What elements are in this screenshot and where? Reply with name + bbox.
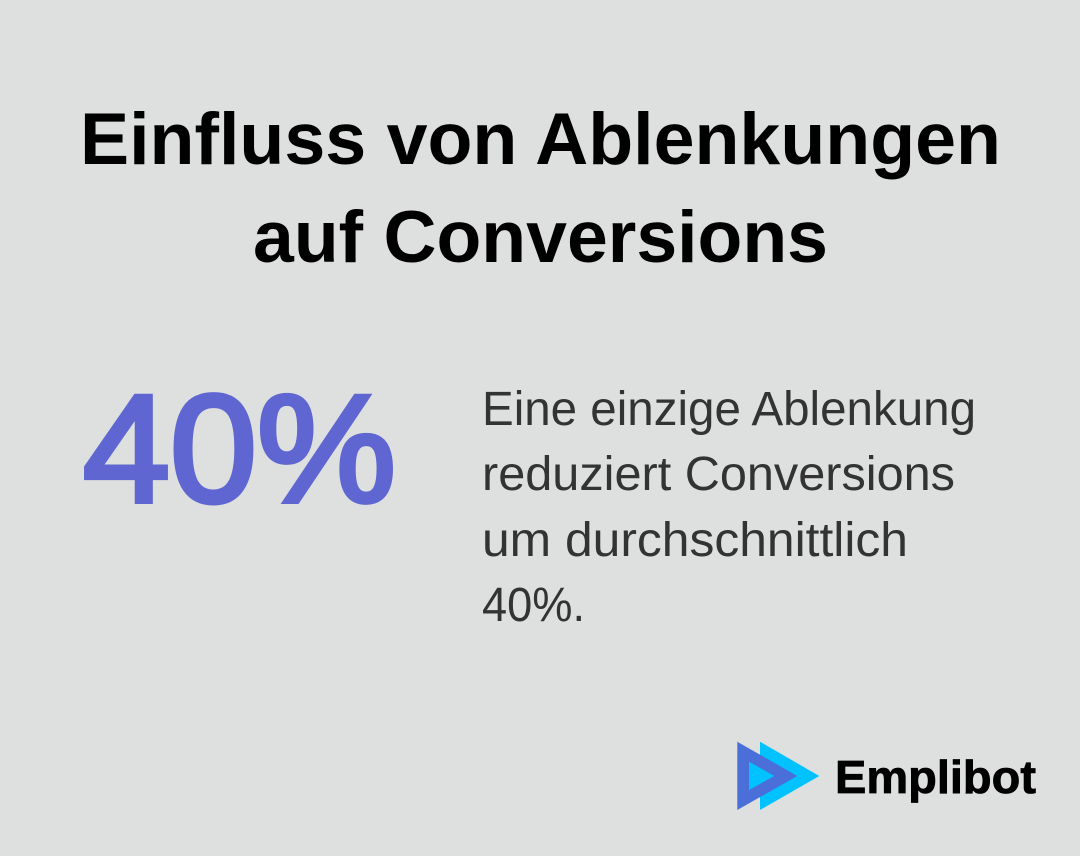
description text: 40%. <box>482 579 585 632</box>
big statistic: 40%: 40% <box>83 364 396 534</box>
description text: um durchschnittlich <box>482 514 908 567</box>
title: Einfluss von Ablenkungen <box>80 99 1001 180</box>
title <box>80 99 1001 278</box>
description text: Eine einzige Ablenkung <box>482 383 976 436</box>
logo wordmark: Emplibot <box>835 751 1036 803</box>
title: auf Conversions <box>253 197 828 278</box>
logo: Emplibot <box>737 742 1036 810</box>
description text: reduziert Conversions <box>482 448 955 501</box>
description text <box>482 383 976 632</box>
icon: play triangles <box>737 742 819 810</box>
